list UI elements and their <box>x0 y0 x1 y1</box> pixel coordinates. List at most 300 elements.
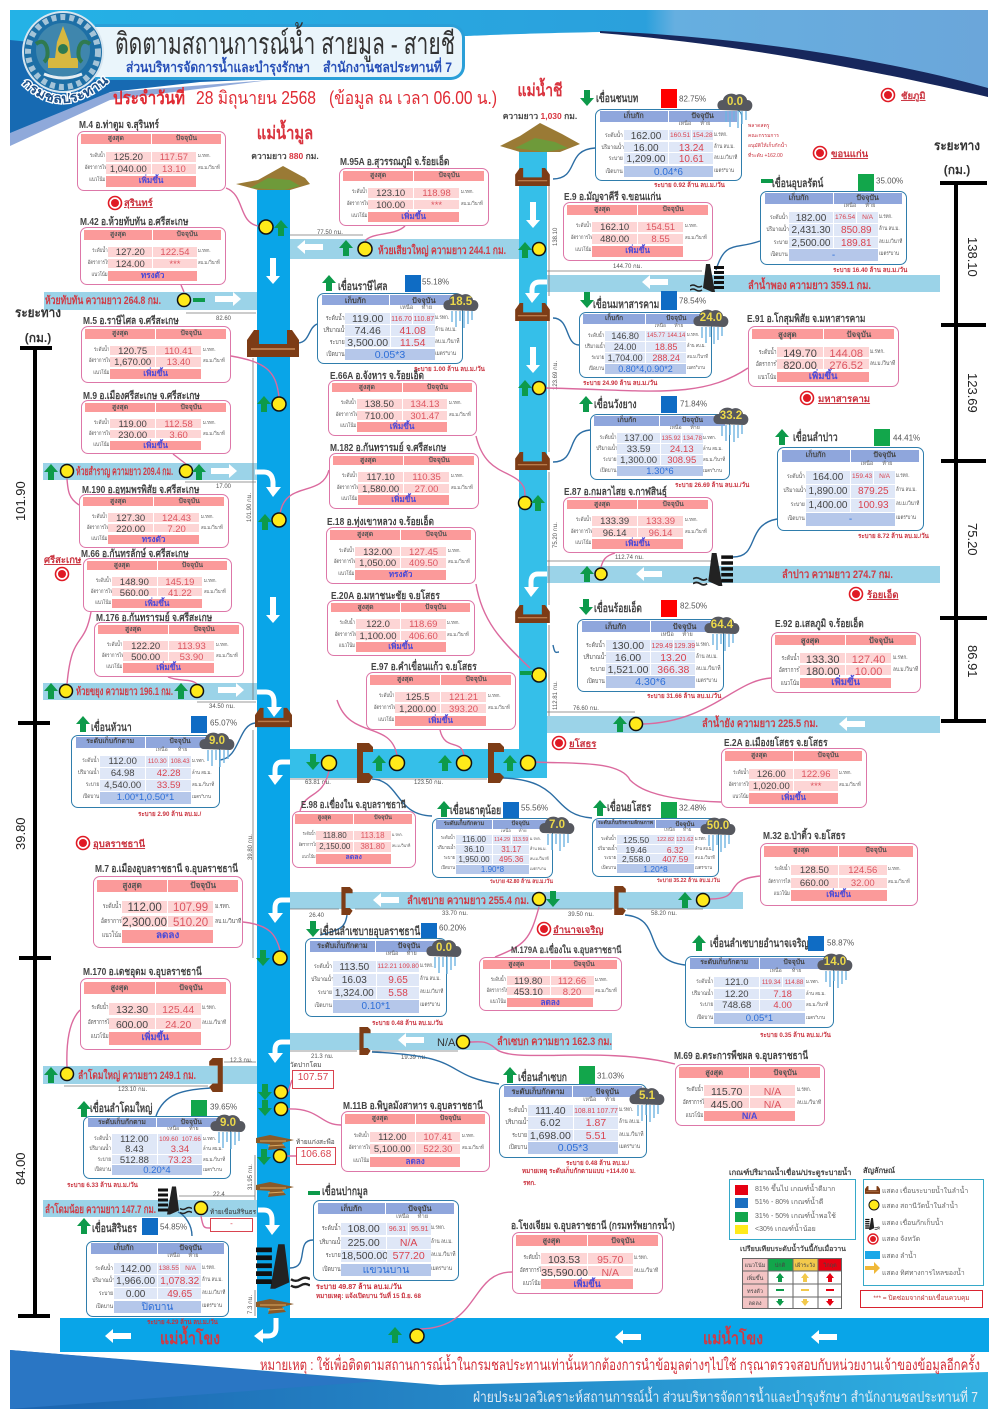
station M.190: M.190 อ.อุทุมพรพิสัย จ.ศรีสะเกษ <box>82 484 199 496</box>
station E.2A: E.2A อ.เมืองยโสธร จ.ยโสธร <box>724 737 828 749</box>
station M.170: 600.00 <box>116 1018 148 1030</box>
station M.5: ม.รทก. <box>203 347 215 353</box>
station E.87: อัตราการไหล <box>571 529 596 535</box>
station M.190: ลบ.ม./วินาที <box>201 525 222 531</box>
station M.32: เพิ่มขึ้น <box>826 890 851 899</box>
station M.190: สูงสุด <box>110 498 126 505</box>
dam: That Noi: เมตร*บาน <box>530 866 546 871</box>
station M.7: ระดับน้ำ <box>103 903 121 910</box>
station M.179A: ระดับน้ำ <box>491 977 506 983</box>
station M.9: เพิ่มขึ้น <box>143 441 168 450</box>
dam: Chonnabot: ระบาย 0.92 ล้าน ลบ.ม./วัน <box>654 182 725 189</box>
dam: Lam Se Bai Amnat Charoen: เหนือ <box>770 968 782 974</box>
station M.4: 13.10 <box>162 164 186 175</box>
dam: Lam Se Bai Amnat Charoen: 0.05*1 <box>746 1013 773 1024</box>
river labels: ลำเซบก ความยาว 162.3 กม. <box>497 1035 612 1048</box>
station M.182: ม.รทก. <box>451 473 463 479</box>
dam: Rasi Salai <box>317 275 485 373</box>
dam: That Noi: 31.17 <box>501 845 521 854</box>
dam: Wang Yang: ปัจจุบัน <box>682 417 703 424</box>
dam: Lam Se Bai Ubon: ล้าน ลบ.ม. <box>420 976 441 982</box>
station M.11B: 107.41 <box>423 1132 452 1143</box>
dam: Roi Et: ม.รทก. <box>696 642 710 648</box>
station E.98: ม.รทก. <box>392 832 403 837</box>
distance values: 26.40 <box>309 913 325 919</box>
station E.66A: 138.50 <box>365 399 394 410</box>
distance values: 22.4 <box>213 1192 225 1198</box>
dam: Sirindhorn: 1,966.00 <box>116 1276 155 1287</box>
station M.42: *** <box>169 259 180 270</box>
station E.92: ปัจจุบัน <box>869 636 894 645</box>
station M.32 <box>760 828 918 906</box>
station M.170: 125.44 <box>162 1004 194 1016</box>
station E.18: ม.รทก. <box>448 548 460 554</box>
river labels: แม่น้ำโขง <box>703 1325 763 1348</box>
station M.7: ลดลง <box>156 930 179 941</box>
dam: Roi Et: ท้าย <box>682 632 693 638</box>
station M.69: สูงสุด <box>705 1068 723 1077</box>
right distance scale: ระยะทาง <box>934 138 980 153</box>
station M.95A: แนวโน้ม <box>351 213 367 219</box>
dam: Lam Se Bai Ubon: ระบาย 0.48 ล้าน ลบ.ม./วัน <box>372 1020 443 1027</box>
station M.11B: แนวโน้ม <box>353 1158 369 1164</box>
distance values: 112.81 กม. <box>553 681 559 710</box>
station M.190: ม.รทก. <box>201 514 213 520</box>
dam: Lam Se Bai Amnat Charoen: เมตร*บาน <box>806 1015 825 1021</box>
station Khong Chiam: 95.70 <box>597 1254 623 1266</box>
dam: Lam Se Bai Ubon: 0.0 <box>436 942 452 954</box>
dam: Maha Sarakham: 144.14 <box>667 333 685 339</box>
station E.66A: เพิ่มขึ้น <box>390 422 414 431</box>
station E.66A: ม.รทก. <box>449 400 461 406</box>
dam: Pak Mun: 18,500.00 <box>341 1250 388 1262</box>
dam: Ubol Ratana: 850.89 <box>841 225 872 236</box>
dam: Chonnabot: ระดับน้ำ <box>605 132 623 139</box>
dam: Hua Na: ระดับน้ำ <box>82 758 99 764</box>
dam: Roi Et: เก็บกัก <box>605 622 626 631</box>
dam: Lam Se Bai Ubon: 5.58 <box>388 988 408 999</box>
dam: Hua Na: ระบาย <box>86 782 99 788</box>
dam: That Noi: 36.10 <box>464 845 484 854</box>
station E.92: ม.รทก. <box>893 655 907 661</box>
station M.95A: 100.00 <box>376 200 405 211</box>
distance values: 112.74 กม. <box>615 555 644 561</box>
dam: Pak Mun: ลบ.ม./วินาที <box>431 1252 456 1258</box>
note beside Chonnabot dam: ที่ระดับ +162.00 <box>748 153 783 159</box>
dam: Chonnabot: 160.51 <box>670 132 690 139</box>
station M.32: อัตราการไหล <box>768 879 793 885</box>
station E.87 <box>563 485 713 553</box>
station E.87: E.87 อ.กมลาไสย จ.กาฬสินธุ์ <box>564 486 667 498</box>
dam: Roi Et: เขื่อนร้อยเอ็ด <box>594 603 642 615</box>
distance values: 101.90 กม. <box>247 492 253 522</box>
station E.98: ลดลง <box>346 854 362 861</box>
station M.95A: อัตราการไหล <box>347 201 372 207</box>
station E.97: ระดับน้ำ <box>379 693 394 699</box>
station M.32: ลบ.ม./วินาที <box>888 879 910 885</box>
dam: Sirindhorn <box>86 1218 229 1326</box>
dam: Lam Se Bok: 108.81 <box>574 1108 595 1115</box>
dam: Lam Se Bok: ม.รทก. <box>619 1107 633 1113</box>
right distance scale: 123.69 <box>965 373 980 413</box>
dam: Rasi Salai: ม.รทก. <box>435 315 450 321</box>
distance values: 19.39 กม. <box>401 1055 427 1061</box>
station M.170: 24.20 <box>165 1018 191 1030</box>
station E.9: ปัจจุบัน <box>662 206 684 213</box>
station M.42: 124.00 <box>116 259 145 270</box>
dam: Chonnabot: ปัจจุบัน <box>691 111 714 120</box>
connector lines: stations <box>67 188 771 1329</box>
dam: Lam Se Bok: 5.51 <box>586 1130 606 1142</box>
dam: That Noi: ม.รทก. <box>530 836 541 841</box>
dam: Yasothon: ระบาย <box>604 855 616 861</box>
dam: Wang Yang: ล้าน ลบ.ม. <box>703 446 723 452</box>
dam: Lam Se Bai Ubon: ระดับเก็บกักตาม <box>317 941 368 950</box>
dam: Yasothon: 2,558.0 <box>622 854 650 864</box>
station M.11B: ระดับน้ำ <box>354 1133 369 1139</box>
dam: Lam Se Bai Amnat Charoen <box>685 936 834 1039</box>
dam: Hua Na <box>71 716 237 818</box>
gauge callout: Wat Pak Dom: 107.57 <box>298 1072 328 1083</box>
dam: Roi Et: ระบาย 31.66 ล้าน ลบ.ม./วัน <box>647 693 721 700</box>
dam: Pak Mun: เขื่อนปากมูล <box>322 1186 368 1198</box>
station M.179A: 8.20 <box>563 987 581 998</box>
station M.42: ทรงตัว <box>141 271 164 280</box>
station E.20A: อัตราการไหล <box>335 632 360 638</box>
station E.87: ลบ.ม./วินาที <box>685 529 706 535</box>
distance values: 77.50 กม. <box>317 230 343 236</box>
text: 65.07% <box>210 718 237 728</box>
station M.182: ลบ.ม./วินาที <box>451 485 472 491</box>
station E.66A: ลบ.ม./วินาที <box>449 412 471 418</box>
station M.182: 117.10 <box>366 472 395 483</box>
station E.9: สูงสุด <box>594 206 610 213</box>
station E.91: ระดับน้ำ <box>759 349 777 356</box>
dam: Chonnabot: 162.00 <box>631 131 661 142</box>
dam: Lam Se Bai Amnat Charoen: ระดับเก็บกักตาม <box>700 959 748 966</box>
dam: Lam Dom Yai: 0.20*4 <box>143 1165 171 1176</box>
station E.2A: 126.00 <box>757 769 786 780</box>
dam: That Noi: 1,950.00 <box>458 855 490 864</box>
date heading: 28 มิถุนายน 2568 <box>196 88 316 109</box>
dam: Lam Dom Yai: 73.23 <box>168 1155 192 1166</box>
dam: Lam Dom Yai: 39.65% <box>210 1102 237 1112</box>
dam: Pak Mun: แขวนบาน <box>363 1264 409 1276</box>
legend: trend comparison table: วิกฤต <box>822 1262 837 1269</box>
station E.91: 149.70 <box>783 348 817 360</box>
gauge callout: Wat Pak Dom <box>290 1061 336 1090</box>
station E.91: 820.00 <box>783 360 817 372</box>
legend: trend comparison table: ปกติ <box>775 1262 786 1269</box>
dam: Sirindhorn: เขื่อนสิรินธร <box>92 1223 137 1235</box>
station M.95A: *** <box>431 200 442 211</box>
dam: Ubol Ratana: ระดับน้ำ <box>770 214 788 221</box>
dam: Chonnabot: 16.00 <box>634 142 659 154</box>
station M.182: M.182 อ.กันทรารมย์ จ.ศรีสะเกษ <box>330 442 446 454</box>
gauge station dots <box>60 220 710 1343</box>
river labels: ห้วยขยุง ความยาว 196.1 กม. <box>76 685 173 699</box>
legend: trend comparison table: แนวโน้ม <box>745 1261 766 1269</box>
station E.98: อัตราการไหล <box>299 843 320 848</box>
dam: Ubol Ratana: 176.54 <box>835 214 855 221</box>
dam: Lam Se Bai Amnat Charoen: 7.18 <box>773 988 792 1000</box>
station M.176: M.176 อ.กันทรารมย์ จ.ศรีสะเกษ <box>96 612 212 624</box>
dam: Rasi Salai: 41.08 <box>400 325 426 337</box>
dam: Yasothon: 50.0 <box>707 820 729 832</box>
station M.32: ปัจจุบัน <box>865 847 887 854</box>
dam: Lam Pao: เขื่อนลำปาว <box>793 432 838 444</box>
station E.9: อัตราการไหล <box>571 235 596 241</box>
station E.92: อัตราการไหล <box>779 667 808 674</box>
station E.66A: อัตราการไหล <box>336 412 361 418</box>
station E.9 <box>563 190 713 261</box>
dam: Lam Se Bok: ลบ.ม./วินาที <box>619 1132 643 1138</box>
text: 58.87% <box>827 938 854 948</box>
distance values: 58.20 กม. <box>651 911 677 917</box>
station M.66: ปัจจุบัน <box>182 562 203 569</box>
dam: Lam Pao: เปิดบาน <box>787 515 805 522</box>
station M.42: 122.54 <box>160 247 189 258</box>
dam: Rasi Salai: ล้าน ลบ.ม. <box>435 327 457 333</box>
heading: Mun river: แม่น้ำมูล <box>257 123 313 143</box>
station E.66A <box>328 368 477 436</box>
dam: Chonnabot: ม.รทก. <box>714 132 728 138</box>
dam: Chonnabot: เหนือ <box>679 121 691 127</box>
station M.4: แนวโน้ม <box>89 177 105 183</box>
dam: Pak Mun: เมตร*บาน <box>431 1266 452 1272</box>
dam: Yasothon: 122.82 <box>657 837 674 843</box>
dam: Maha Sarakham <box>579 291 728 387</box>
dam: Lam Se Bai Ubon: เปิดบาน <box>315 1002 332 1009</box>
station M.170: เพิ่มขึ้น <box>141 1032 169 1042</box>
dam: Maha Sarakham: 146.80 <box>611 331 639 341</box>
station M.5: M.5 อ.ราษีไศล จ.ศรีสะเกษ <box>83 315 179 327</box>
station M.170: 132.30 <box>116 1004 148 1016</box>
dam: Roi Et: เมตร*บาน <box>696 678 717 684</box>
dam: Roi Et: 82.50% <box>680 602 707 610</box>
river labels: ลำเซบาย ความยาว 255.4 กม. <box>407 894 529 907</box>
dam: Yasothon: ท้าย <box>683 827 691 832</box>
station M.176: ลบ.ม./วินาที <box>216 653 237 659</box>
dam: Chonnabot: เก็บกัก <box>624 111 644 120</box>
legend: symbols: สัญลักษณ์ <box>863 1166 895 1175</box>
dam: Rasi Salai: 110.87 <box>413 316 434 323</box>
station M.5: 13.40 <box>167 357 190 368</box>
station M.5: 110.41 <box>164 346 193 357</box>
dam: Sirindhorn: เก็บกัก <box>114 1243 134 1252</box>
dam: Hua Na: ระบาย 2.90 ล้าน ลบ.ม./ <box>138 811 201 818</box>
station M.95A: ปัจจุบัน <box>438 172 460 179</box>
dam: Pak Mun: ปัจจุบัน <box>408 1204 432 1213</box>
river labels: ห้วยเสียวใหญ่ ความยาว 244.1 กม. <box>378 243 506 257</box>
distance values: 31.95 กม. <box>248 1164 254 1190</box>
dam: Rasi Salai: 18.5 <box>450 296 472 308</box>
station M.9: M.9 อ.เมืองศรีสะเกษ จ.ศรีสะเกษ <box>83 390 200 402</box>
dam: Lam Dom Yai: 512.88 <box>120 1155 149 1166</box>
dam: Yasothon: ปัจจุบัน <box>675 821 694 828</box>
dam: Lam Se Bai Ubon: ปริมาณน้ำ <box>311 976 334 983</box>
dam: Ubol Ratana: N/A <box>862 214 873 221</box>
dam: Lam Se Bai Amnat Charoen: 114.88 <box>785 979 803 986</box>
station E.92 <box>771 616 921 693</box>
station M.69: ลบ.ม./วินาที <box>797 1100 821 1106</box>
dam: That Noi: ระบาย <box>444 856 455 861</box>
dam: Hua Na: เมตร*บาน <box>192 794 211 800</box>
dam: Pak Mun: หมายเหตุ: แจ้งเปิดบาน วันที่ 15 มิ.ย. 68 <box>316 1293 421 1300</box>
dam: Roi Et: ระบาย <box>590 666 605 673</box>
dam: That Noi: ปริมาณน้ำ <box>437 846 456 851</box>
station E.97: สูงสุด <box>397 676 413 683</box>
station M.170: M.170 อ.เดชอุดม จ.อุบลราชธานี <box>83 966 202 978</box>
text: 7.0 <box>549 819 565 831</box>
station M.95A: ม.รทก. <box>461 189 473 195</box>
dam: Roi Et: ปัจจุบัน <box>673 622 696 631</box>
dam: Lam Dom Yai: 109.60 <box>159 1136 178 1143</box>
white flow arrows <box>105 202 865 1344</box>
dam: Lam Pao: เหนือ <box>861 461 873 467</box>
station M.182: สูงสุด <box>360 457 376 464</box>
station M.170 <box>80 966 231 1050</box>
station M.179A: สูงสุด <box>508 961 524 968</box>
station M.69: อัตราการไหล <box>683 1099 710 1106</box>
station M.7: แนวโน้ม <box>102 932 121 939</box>
station M.69: N/A <box>764 1086 781 1098</box>
dam: Lam Dom Yai: ระดับน้ำ <box>94 1136 111 1142</box>
distance values: 82.60 <box>216 316 232 322</box>
station M.66: ระดับน้ำ <box>96 578 111 584</box>
dam: Rasi Salai: 3,500.00 <box>347 337 388 349</box>
station M.7: 510.20 <box>173 916 208 928</box>
station M.182: แนวโน้ม <box>341 496 357 502</box>
dam: Maha Sarakham: ท้าย <box>674 324 683 329</box>
province markers: สุรินทร์ <box>124 197 154 209</box>
station E.18: แนวโน้ม <box>338 571 354 577</box>
dam: Lam Dom Yai: 9.0 <box>220 1117 236 1129</box>
dam: Yasothon: ลบ.ม./วินาที <box>695 856 715 861</box>
dam: Yasothon: 407.59 <box>662 854 688 864</box>
dam: Hua Na: เหนือ <box>156 747 168 753</box>
dam: Lam Se Bai Ubon: 0.10*1 <box>362 1001 390 1012</box>
station M.11B: M.11B อ.พิบูลมังสาหาร จ.อุบลราชธานี <box>343 1100 483 1112</box>
station M.179A <box>479 943 622 1011</box>
station Khong Chiam: สูงสุด <box>542 1236 560 1245</box>
station E.87: 133.39 <box>600 516 629 527</box>
dam: Lam Pao: 879.25 <box>858 486 889 497</box>
station E.20A: 122.0 <box>366 619 390 630</box>
dam: Rasi Salai: เหนือ <box>400 305 413 311</box>
dam: Wang Yang: ลบ.ม./วินาที <box>703 457 726 463</box>
station M.32: 32.00 <box>851 878 875 889</box>
dam: Pak Mun: ระบาย <box>326 1252 341 1259</box>
station E.97: ปัจจุบัน <box>465 676 487 683</box>
legend: trend comparison table <box>740 1245 844 1309</box>
dam: Ubol Ratana: - <box>832 250 835 261</box>
station E.9: เพิ่มขึ้น <box>625 246 650 255</box>
station E.92: ลบ.ม./วินาที <box>893 667 918 673</box>
trend arrows <box>44 220 692 1343</box>
dam: Lam Se Bok: ระดับน้ำ <box>508 1107 527 1114</box>
dam: Lam Se Bai Ubon: เหนือ <box>386 951 398 957</box>
dam: Hua Na: ล้าน ลบ.ม. <box>192 770 211 776</box>
dam: Ubol Ratana: ท้าย <box>865 203 875 209</box>
station E.91: 144.08 <box>829 348 863 360</box>
dam: Hua Na: 42.28 <box>157 768 181 779</box>
dam: Yasothon: ล้าน ลบ.ม. <box>695 847 712 852</box>
station E.92: 10.00 <box>855 666 882 678</box>
dam: Rasi Salai: เปิดบาน <box>326 351 345 358</box>
dam: Maha Sarakham: ปริมาณน้ำ <box>585 344 605 350</box>
dam: Ubol Ratana: 2,431.30 <box>792 225 830 236</box>
dam: That Noi: 1.90*8 <box>481 865 504 874</box>
station M.69: 445.00 <box>711 1099 743 1111</box>
dam: Roi Et: 130.00 <box>612 640 644 652</box>
station M.69: 115.70 <box>711 1086 742 1098</box>
station E.20A <box>327 589 475 656</box>
dam: Yasothon: เขื่อนยโสธร <box>607 802 651 814</box>
dam: Lam Se Bok: 31.03% <box>597 1072 624 1080</box>
station Khong Chiam: N/A <box>601 1267 619 1279</box>
river labels: ลำน้ำพอง ความยาว 359.1 กม. <box>748 277 871 292</box>
dam: Lam Se Bok: ระบาย <box>512 1132 527 1139</box>
dam: Lam Se Bai Amnat Charoen: ระบาย <box>700 1002 713 1008</box>
dam: Pak Mun: 95.91 <box>411 1226 428 1233</box>
station M.5: สูงสุด <box>112 330 128 337</box>
station E.91: ม.รทก. <box>870 349 885 355</box>
dam: Lam Dom Yai: ปัจจุบัน <box>181 1119 202 1126</box>
station M.11B: ปัจจุบัน <box>440 1115 461 1122</box>
legend: symbols: แสดง ทิศทางการไหลของน้ำ <box>882 1270 965 1277</box>
dam: Yasothon: ระบาย 35.22 ล้าน ลบ.ม./วัน <box>657 878 720 884</box>
dam: Hua Na: ลบ.ม./วินาที <box>192 782 214 788</box>
dam: That Noi <box>432 801 574 885</box>
footer band <box>10 1350 988 1409</box>
station Khong Chiam: เพิ่มขึ้น <box>573 1279 601 1289</box>
station M.42: ม.รทก. <box>198 248 211 254</box>
dam: Lam Pao: ระบาย <box>791 501 805 508</box>
station M.95A: 118.98 <box>422 188 451 199</box>
dam: Lam Se Bai Amnat Charoen: ล้าน ลบ.ม. <box>806 990 825 996</box>
dam: Chonnabot: 13.24 <box>679 142 704 154</box>
left distance scale: 101.90 <box>13 481 28 521</box>
dam: Sirindhorn: ล้าน ลบ.ม. <box>202 1277 222 1283</box>
station M.176: อัตราการไหล <box>102 653 127 659</box>
dam: Sirindhorn: 1,078.32 <box>160 1276 199 1287</box>
dam: Maha Sarakham: ระบาย 24.90 ล้าน ลบ.ม./วัน <box>583 380 657 387</box>
dam: Pak Mun: 225.00 <box>348 1237 380 1249</box>
station M.95A <box>339 154 489 226</box>
distance values: 12.3 กม. <box>230 1058 253 1064</box>
dam: Yasothon: ระดับน้ำ <box>601 836 616 842</box>
station E.87: 133.39 <box>646 516 675 527</box>
dam: Wang Yang <box>579 396 750 489</box>
text: 33.2 <box>720 410 742 422</box>
heading: Chi river: แม่น้ำชี <box>518 81 562 100</box>
station M.66: 145.19 <box>165 577 194 588</box>
dam: Lam Se Bok: ล้าน ลบ.ม. <box>619 1119 641 1125</box>
station E.9: ลบ.ม./วินาที <box>685 235 706 241</box>
dam: Roi Et: 129.49 <box>652 643 673 650</box>
station M.66 <box>81 548 232 612</box>
station M.176: 113.93 <box>177 641 206 652</box>
station E.18: อัตราการไหล <box>334 559 359 565</box>
station M.69 <box>674 1050 825 1126</box>
dam: Lam Se Bok: ระบาย 0.48 ล้าน ลบ.ม./ <box>566 1160 629 1167</box>
station M.7: ม.รทก. <box>215 903 230 910</box>
dam: Chonnabot: 10.61 <box>679 154 704 165</box>
station M.66: อัตราการไหล <box>91 589 116 595</box>
dam: Pak Mun: 96.31 <box>389 1226 406 1233</box>
station M.4: 125.20 <box>114 152 143 163</box>
